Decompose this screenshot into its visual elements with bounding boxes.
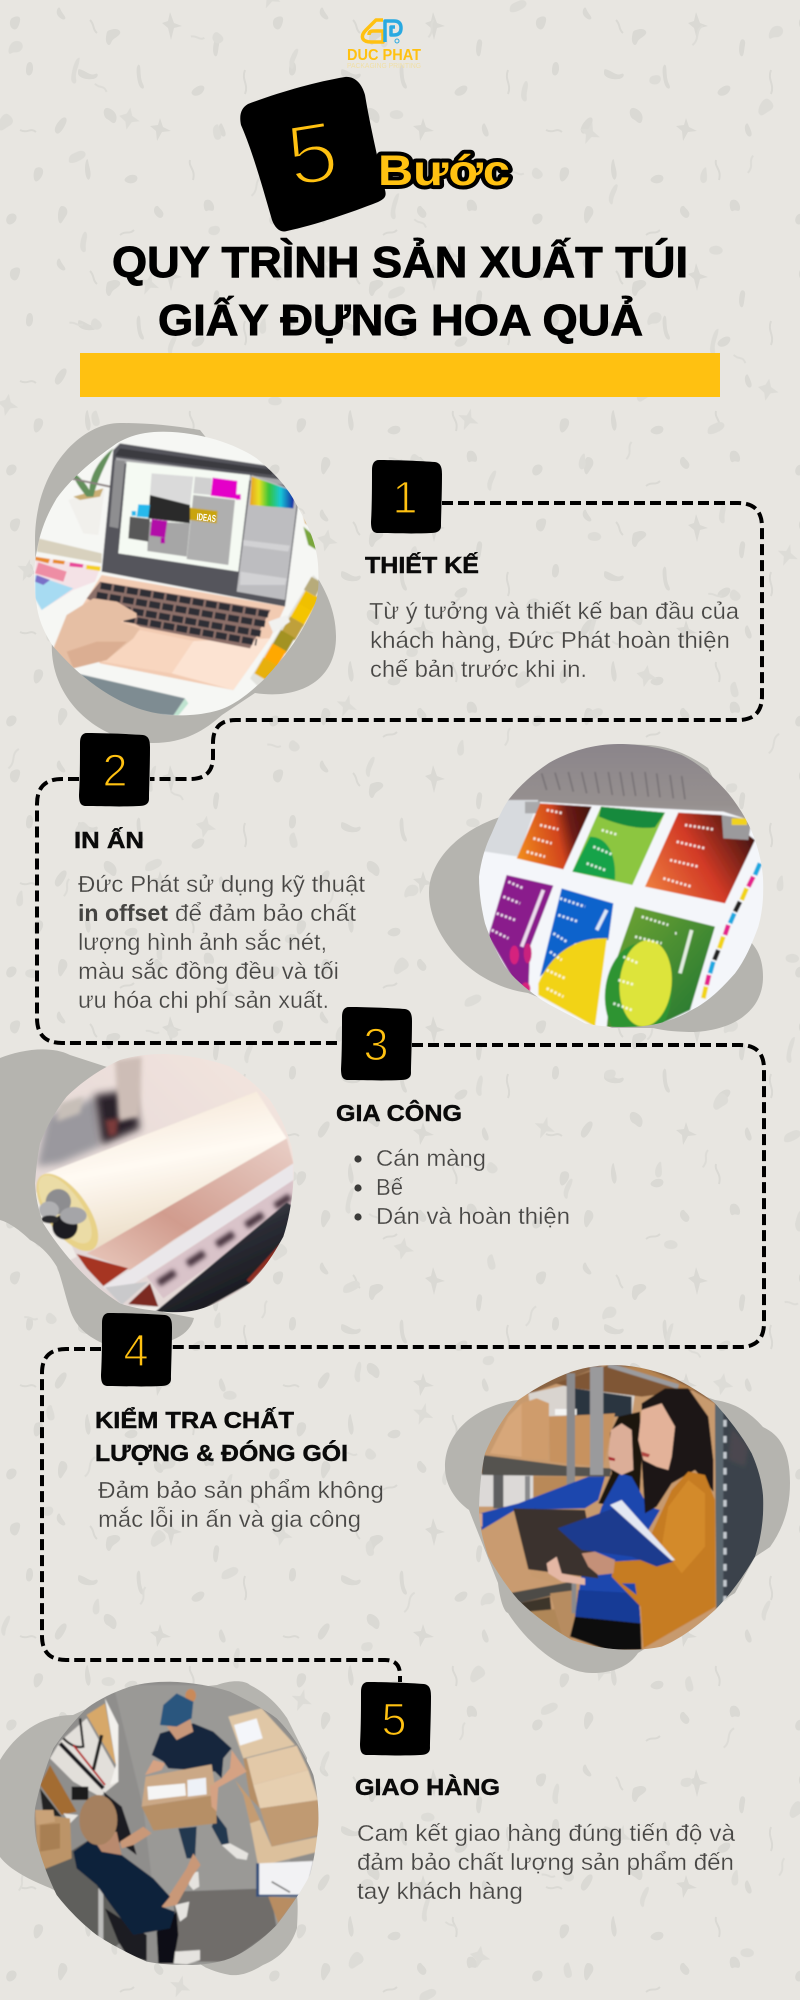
photo 3: laminating roller	[35, 1056, 294, 1312]
photo 1: laptop base	[70, 575, 285, 690]
step 4 body: mắc lỗi in ấn và gia công	[98, 1506, 361, 1532]
logo: Duc Phat: PACKAGING PRINTING	[347, 61, 421, 70]
step 2 body: ưu hóa chi phí sản xuất.	[78, 987, 329, 1013]
connector line 2 to 3	[37, 779, 337, 1043]
step 4 heading: KIỂM TRA CHẤT	[95, 1406, 294, 1433]
title: QUY TRÌNH SẢN XUẤT TÚI	[112, 237, 688, 287]
grey blob behind photo 1	[35, 423, 336, 743]
photo 5: van	[35, 1698, 137, 1872]
photo 5: parcel	[142, 1764, 218, 1831]
step 3 bullet list: Cán màng	[376, 1145, 486, 1171]
photo 5: delivery handover	[34, 1682, 318, 1965]
grey blob behind photo 4	[445, 1365, 790, 1673]
step 5 heading: GIAO HÀNG	[355, 1773, 500, 1800]
photo 4: warehouse staff	[475, 1360, 770, 1655]
photo 1: on-screen word: IDEAS	[196, 512, 217, 525]
step 2 body: màu sắc đồng đều và tối	[78, 958, 339, 984]
step 4 heading	[95, 1406, 348, 1466]
step 4 body: Đảm bảo sản phẩm không	[98, 1477, 384, 1503]
connector line 3 to 4	[172, 1045, 764, 1347]
step 1 body: Từ ý tưởng và thiết kế ban đầu của	[369, 598, 739, 624]
photo 5: woman in cap	[145, 1689, 248, 1890]
step 2 body: Đức Phát sử dụng kỹ thuật	[78, 871, 366, 897]
photo 1: plant	[72, 448, 114, 502]
step 5 body: Cam kết giao hàng đúng tiến độ và	[357, 1820, 735, 1846]
step 2 body	[78, 871, 366, 1013]
step 3 heading: GIA CÔNG	[336, 1099, 462, 1126]
grey blob behind photo 5	[0, 1681, 307, 1975]
step 2 body: lượng hình ảnh sắc nét,	[78, 929, 327, 955]
step 2 badge: 2	[102, 745, 128, 796]
step 5 body: đảm bảo chất lượng sản phẩm đến	[357, 1849, 734, 1875]
photo 1: colour guide	[250, 575, 323, 688]
step 5 badge	[360, 1682, 431, 1755]
step 1 heading: THIẾT KẾ	[365, 551, 479, 578]
step 3 badge: 3	[363, 1019, 389, 1070]
logo: Duc Phat: DUC PHAT	[347, 47, 421, 64]
logo: Duc Phat	[347, 20, 421, 70]
step 1 body	[369, 598, 739, 682]
heading word: Bước: Bước	[378, 147, 510, 195]
photo 5: boxes	[228, 1708, 320, 1923]
title: GIẤY ĐỰNG HOA QUẢ	[158, 295, 643, 345]
title	[112, 237, 688, 345]
grey blob behind photo 2	[429, 744, 763, 1032]
step 4 badge	[101, 1313, 172, 1386]
step 4 heading: LƯỢNG & ĐÓNG GÓI	[95, 1439, 348, 1466]
step 2 badge	[79, 733, 150, 806]
step 3 bullet list: Bế	[376, 1174, 403, 1200]
step 5 badge: 5	[381, 1694, 407, 1745]
badge: big number 5: 5	[280, 103, 345, 205]
step 4 body	[98, 1477, 384, 1532]
connector line 1 to 2	[150, 503, 762, 779]
step 5 body: tay khách hàng	[357, 1878, 523, 1904]
step 2 body: để đảm bảo chất	[175, 900, 357, 926]
step 3 badge	[341, 1007, 412, 1080]
step 1 badge: 1	[392, 472, 418, 523]
step 4 badge: 4	[123, 1325, 149, 1376]
yellow banner bar	[80, 353, 720, 397]
step 1 body: chế bản trước khi in.	[370, 656, 587, 682]
step 3 bullet list: Dán và hoàn thiện	[376, 1203, 570, 1229]
step 1 badge	[371, 460, 442, 533]
step 2 heading: IN ẤN	[74, 826, 144, 853]
connector line 4 to 5	[42, 1349, 400, 1682]
step 2 body: in offset	[78, 900, 168, 926]
grey blob behind photo 3	[0, 1049, 194, 1346]
step 5 body	[357, 1820, 735, 1904]
photo 2: offset printing sheet	[479, 744, 764, 1027]
photo 1: laptop design	[34, 432, 318, 716]
photo 5: man	[73, 1795, 201, 1964]
step 1 body: khách hàng, Đức Phát hoàn thiện	[370, 627, 730, 653]
badge: big number 5	[240, 77, 386, 231]
step 3 bullet list	[354, 1145, 570, 1229]
